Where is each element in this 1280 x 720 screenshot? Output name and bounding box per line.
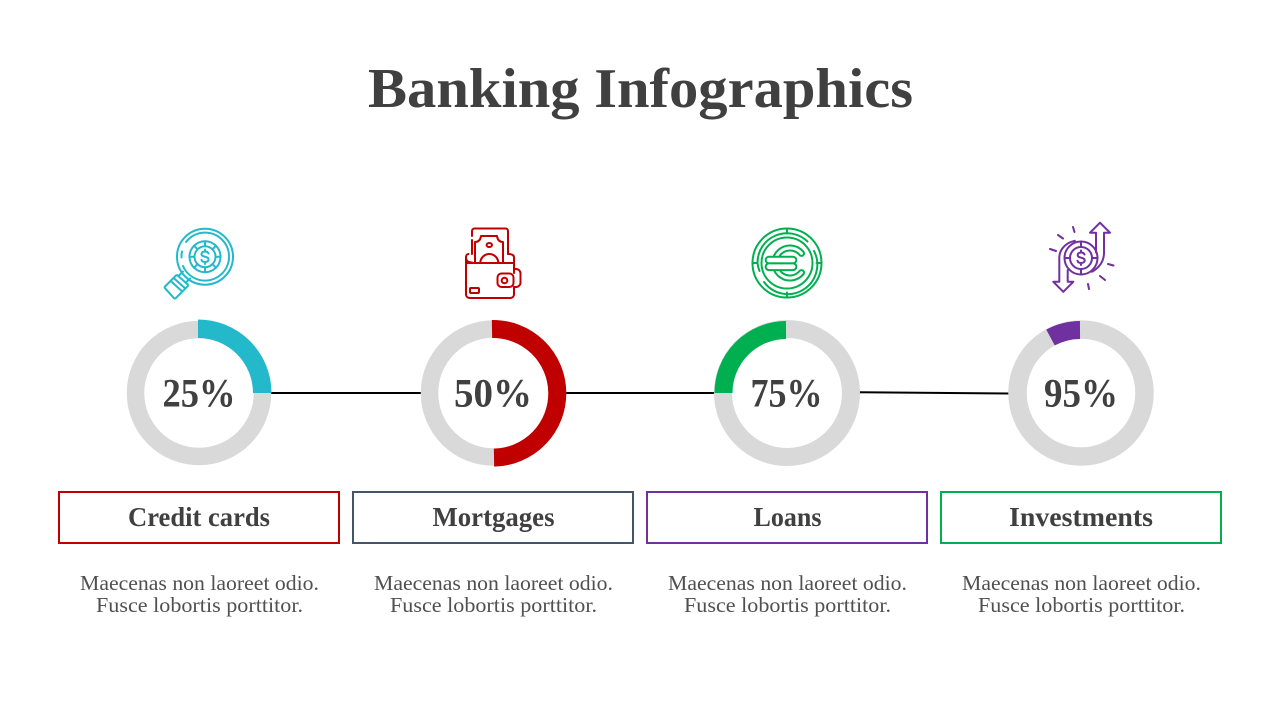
column: loans [647, 228, 927, 617]
icon: magnifier with dollar [165, 229, 233, 299]
connector: 75% to 95% [859, 392, 1009, 394]
donut: 75% [723, 329, 851, 457]
description: credit cards: Maecenas non laoreet odio. [80, 571, 319, 595]
label box: mortgages [353, 492, 633, 543]
title: Banking Infographics [368, 58, 913, 120]
label box: investments: Investments [1009, 502, 1153, 532]
column: credit cards [59, 229, 339, 617]
connector: 50% to 75% [565, 392, 716, 394]
donut: 50% [430, 329, 558, 458]
donut: 25% [136, 329, 262, 456]
label box: credit cards: Credit cards [128, 502, 270, 532]
icon: euro coin [752, 228, 822, 298]
description: loans: Fusce lobortis porttitor. [684, 593, 891, 617]
description: credit cards: Fusce lobortis porttitor. [96, 593, 303, 617]
donut: 95% [1018, 330, 1144, 456]
description: mortgages: Fusce lobortis porttitor. [390, 593, 597, 617]
percent: 50%: 50% [454, 370, 532, 416]
label box: investments [941, 492, 1221, 543]
description: loans: Maecenas non laoreet odio. [668, 571, 907, 595]
label box: loans [647, 492, 927, 543]
label box: credit cards [59, 492, 339, 543]
percent: 25%: 25% [162, 370, 236, 416]
column: investments [941, 223, 1221, 617]
description: investments [962, 571, 1201, 617]
icon: coin with up and down arrows [1050, 223, 1114, 292]
description: loans [668, 571, 907, 617]
percent: 95%: 95% [1044, 370, 1118, 416]
description: investments: Fusce lobortis porttitor. [978, 593, 1185, 617]
label box: mortgages: Mortgages [432, 502, 554, 532]
icon: wallet with banknote [466, 228, 520, 298]
column: mortgages [353, 228, 633, 617]
connector: 25% to 50% [271, 392, 422, 394]
description: mortgages: Maecenas non laoreet odio. [374, 571, 613, 595]
description: investments: Maecenas non laoreet odio. [962, 571, 1201, 595]
label box: loans: Loans [754, 502, 822, 532]
description: credit cards [80, 571, 319, 617]
description: mortgages [374, 571, 613, 617]
percent: 75%: 75% [750, 370, 822, 416]
